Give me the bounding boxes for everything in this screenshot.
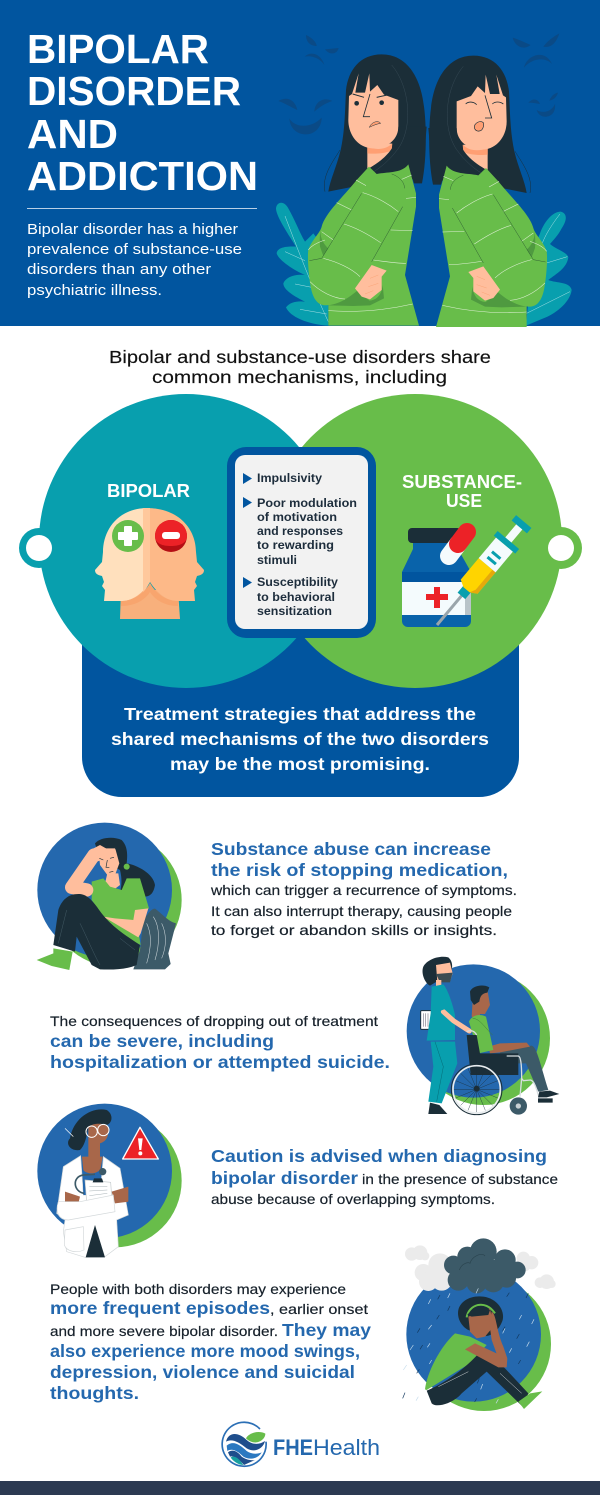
text: consequences of dropping out: hospitalization or attempted suicide. — [50, 1052, 390, 1072]
text: caution when diagnosing: Caution is advised when diagnosing — [211, 1146, 547, 1166]
text: both disorders: , earlier onset — [270, 1301, 368, 1317]
list item: susceptibility: Susceptibility — [257, 577, 339, 589]
intro text: psychiatric illness. — [27, 282, 162, 299]
icon: faint faces — [278, 33, 559, 134]
list item: susceptibility — [243, 577, 339, 618]
list item: susceptibility: to behavioral — [257, 592, 335, 604]
intro text — [27, 221, 242, 299]
panel: shared mechanisms list — [227, 447, 376, 638]
venn: bipolar circle — [19, 394, 333, 688]
icon: syringe — [426, 513, 535, 634]
text: caution when diagnosing — [211, 1146, 558, 1207]
intro text: disorders than any other — [27, 261, 211, 278]
title: AND — [27, 111, 118, 157]
text: consequences of dropping out: can be severe, including — [50, 1031, 274, 1051]
text: consequences of dropping out: The consequences of dropping out of treatment — [50, 1013, 378, 1029]
illustration: doctor with warning sign — [37, 1104, 182, 1257]
text: stopping medication: It can also interrupt therapy, causing people — [211, 903, 512, 919]
list item: poor modulation: Poor modulation — [257, 498, 357, 510]
intro text: prevalence of substance-use — [27, 241, 242, 258]
icon: pill — [449, 532, 467, 556]
label: bipolar: BIPOLAR — [107, 481, 190, 501]
text: treatment strategies: may be the most promising. — [170, 754, 430, 774]
text: both disorders: more frequent episodes — [50, 1298, 270, 1318]
list item: impulsivity: Impulsivity — [257, 473, 323, 485]
text: stopping medication: which can trigger a recurrence of symptoms. — [210, 882, 517, 898]
footer bar — [0, 1481, 600, 1495]
wordmark: FHE — [273, 1435, 313, 1460]
illustration: woman sitting with head in hand — [37, 823, 182, 972]
text: stopping medication: the risk of stopping medication, — [211, 860, 508, 880]
text: both disorders: thoughts. — [50, 1383, 139, 1403]
logo: FHE Health — [222, 1422, 380, 1466]
panel: treatment strategies callout — [82, 620, 519, 797]
text: consequences of dropping out — [50, 1013, 390, 1072]
text: treatment strategies: Treatment strategies that address the — [124, 704, 476, 724]
text: caution when diagnosing: abuse because of overlapping symptoms. — [211, 1191, 495, 1207]
label: substance-use: SUBSTANCE- — [402, 472, 522, 492]
figure: right woman — [428, 56, 547, 327]
text: treatment strategies: shared mechanisms of the two disorders — [111, 729, 489, 749]
icon: medicine bottle — [402, 528, 471, 627]
text: both disorders: depression, violence and suicidal — [50, 1362, 355, 1382]
icon: logo mark — [222, 1422, 266, 1466]
list item: poor modulation: and responses — [257, 526, 343, 538]
section heading: shared mechanisms: common mechanisms, including — [152, 367, 447, 387]
wordmark: Health — [313, 1435, 380, 1460]
list item: poor modulation: of motivation — [257, 512, 337, 524]
text: stopping medication: to forget or abandon skills or insights. — [211, 922, 497, 938]
wordmark — [273, 1435, 380, 1460]
illustration: two women back to back — [276, 33, 572, 327]
text: stopping medication — [210, 839, 517, 938]
label: substance-use — [402, 472, 522, 511]
illustration: person under rain cloud — [403, 1238, 556, 1411]
icon: right leaf — [526, 212, 572, 326]
venn: substance-use circle — [268, 394, 582, 688]
list item: poor modulation — [243, 497, 357, 567]
text: both disorders: People with both disorders may experience — [50, 1281, 346, 1297]
text: both disorders: and more severe bipolar disorder. — [50, 1323, 278, 1339]
text: both disorders: They may — [282, 1320, 371, 1340]
title: DISORDER — [27, 68, 241, 114]
header panel — [0, 0, 600, 327]
text: both disorders — [50, 1281, 371, 1403]
text: caution when diagnosing: in the presence of substance — [362, 1171, 558, 1187]
intro text: Bipolar disorder has a higher — [27, 221, 238, 238]
title: ADDICTION — [27, 153, 258, 199]
text: caution when diagnosing: bipolar disorder — [211, 1168, 358, 1188]
illustration: nurse pushing wheelchair — [407, 957, 559, 1115]
text: both disorders: also experience more mood swings, — [50, 1341, 360, 1361]
list item: susceptibility: sensitization — [257, 606, 332, 618]
icon: left leaf — [276, 203, 328, 326]
list item: poor modulation: stimuli — [257, 555, 297, 567]
icon: two-faced head — [95, 508, 204, 619]
label: substance-use: USE — [446, 491, 482, 511]
section heading: shared mechanisms — [109, 347, 491, 387]
list item: poor modulation: to rewarding — [257, 540, 334, 552]
text: treatment strategies — [111, 704, 489, 774]
title — [27, 26, 258, 199]
section heading: shared mechanisms: Bipolar and substance-use disorders share — [109, 347, 491, 367]
text: stopping medication: Substance abuse can increase — [211, 839, 491, 859]
figure: left woman — [308, 54, 427, 326]
title: BIPOLAR — [27, 26, 209, 72]
